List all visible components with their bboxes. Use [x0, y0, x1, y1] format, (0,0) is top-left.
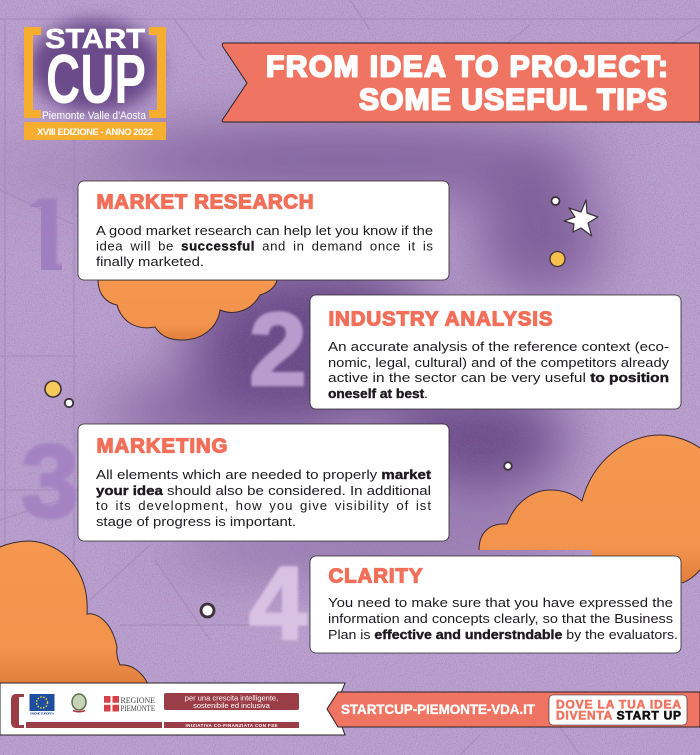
panel: market research: A good market research can help let you know if the — [96, 223, 433, 238]
panel: marketing: MARKETING — [96, 434, 228, 458]
footer logos ribbon: sostenibile ed inclusiva — [193, 701, 271, 710]
number 1: 1 — [14, 176, 76, 301]
logo: Start Cup: CUP — [46, 40, 146, 118]
title ribbon — [222, 43, 700, 122]
panel: marketing: All elements which are needed to properly market — [96, 467, 432, 482]
icon: dot gold left — [45, 381, 61, 397]
title ribbon: SOME USEFUL TIPS — [359, 84, 667, 116]
footer logos ribbon: PIEMONTE — [120, 704, 155, 713]
title ribbon: FROM IDEA TO PROJECT: — [266, 50, 668, 84]
panel: industry analysis: nomic, legal, cultural) and of the competitors already — [328, 355, 669, 370]
panel: market research: idea will be successful and in demand once it is — [96, 238, 433, 254]
icon: dot white left — [65, 399, 73, 407]
footer logos ribbon: INIZIATIVA CO-FINANZIATA CON FSE — [186, 723, 278, 728]
number 2: 2 — [249, 292, 307, 408]
website ribbon: STARTCUP-PIEMONTE-VDA.IT — [341, 702, 536, 717]
logo: Start Cup: XVIII EDIZIONE - ANNO 2022 — [37, 127, 153, 138]
panel: marketing: stage of progress is important. — [96, 514, 296, 529]
icon: dot white lower centre — [201, 604, 214, 617]
footer logos ribbon: per una crescita intelligente, — [185, 694, 278, 702]
icon: star — [564, 200, 598, 236]
panel: marketing: to its development, how you give visibility of ist — [96, 498, 431, 513]
panel: clarity: CLARITY — [328, 564, 423, 588]
footer logos ribbon — [0, 683, 345, 735]
number 3: 3 — [21, 424, 79, 540]
slogan box: DOVE LA TUA IDEA — [556, 698, 681, 712]
panel: industry analysis: active in the sector can be very useful to position — [328, 370, 669, 385]
icon: dot small white top — [552, 197, 560, 205]
panel: marketing — [78, 424, 449, 541]
website ribbon — [327, 692, 700, 727]
logo: Start Cup: Piemonte Valle d'Aosta — [42, 110, 147, 122]
panel: clarity: Plan is effective and understndable by the evaluators. — [328, 627, 678, 642]
logo: Start Cup — [24, 20, 166, 140]
footer logos ribbon: REGIONE — [120, 696, 155, 705]
panel: market research: finally marketed. — [96, 254, 204, 269]
number 4: 4 — [249, 546, 307, 662]
logo: Start Cup: START — [45, 23, 145, 54]
cloud right — [479, 435, 700, 583]
cloud top centre — [98, 280, 277, 340]
footer logos ribbon: UNIONE EUROPEA — [30, 712, 55, 716]
panel: clarity: You need to make sure that you have expressed the — [328, 595, 673, 610]
panel: clarity: information and concepts clearly, so that the Business — [328, 611, 673, 626]
slogan box — [549, 695, 687, 725]
slogan box: DIVENTA START UP — [556, 708, 681, 722]
panel: industry analysis: An accurate analysis of the reference context (eco- — [328, 339, 669, 354]
panel: market research — [78, 181, 449, 280]
panel: industry analysis: INDUSTRY ANALYSIS — [328, 308, 552, 330]
panel: market research: MARKET RESEARCH — [96, 190, 314, 214]
panel: marketing: your idea should also be considered. In additional — [96, 483, 431, 498]
cloud bottom left — [0, 541, 148, 684]
icon: dot gold top — [550, 252, 565, 266]
panel: industry analysis: oneself at best . — [328, 386, 428, 401]
panel: clarity — [310, 556, 681, 653]
panel: industry analysis — [310, 295, 681, 409]
icon: dot white centre right — [504, 462, 512, 470]
